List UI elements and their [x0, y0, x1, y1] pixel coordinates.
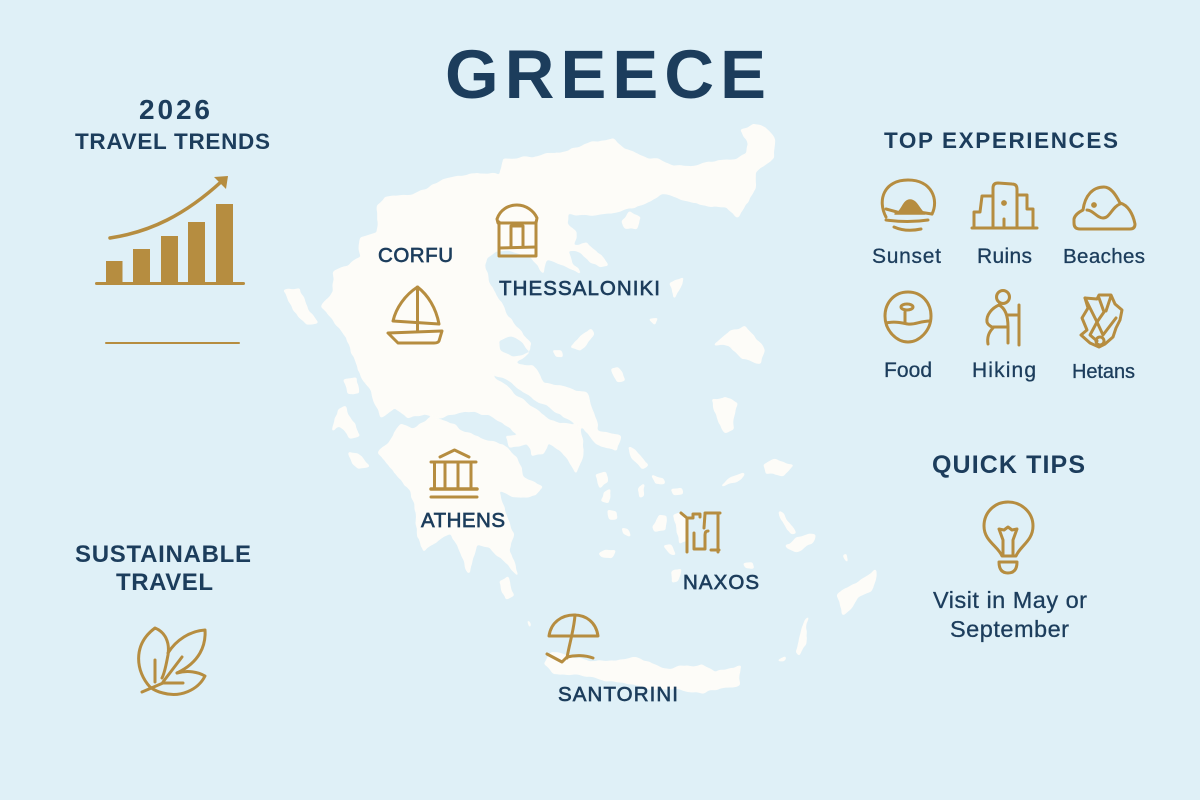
- heading: 2026: 2026: [139, 94, 210, 125]
- heading: sustainable travel: TRAVEL: [116, 569, 213, 596]
- icon: temple: [431, 450, 477, 497]
- label: beaches: Beaches: [1063, 245, 1145, 268]
- marker: Corfu: [378, 244, 453, 343]
- label: Naxos: NAXOS: [683, 571, 759, 594]
- heading: top experiences: TOP EXPERIENCES: [884, 128, 1118, 153]
- panel: sustainable travel: [75, 541, 251, 694]
- panel: travel trends: [75, 94, 270, 343]
- label: Thessaloniki: THESSALONIKI: [499, 277, 660, 300]
- panel: top experiences: [872, 128, 1145, 383]
- panel: quick tips: [932, 451, 1087, 642]
- icon: food: [885, 292, 931, 342]
- icon: sunset: [882, 180, 935, 230]
- label: hiking: Hiking: [972, 359, 1036, 382]
- label: food: Food: [884, 359, 932, 382]
- tip text: Visit in May or: [933, 587, 1087, 613]
- heading: sustainable travel: SUSTAINABLE: [75, 541, 251, 568]
- label: hetans: Hetans: [1072, 361, 1135, 383]
- icon: hiking: [987, 290, 1019, 345]
- heading: travel trends: TRAVEL TRENDS: [75, 129, 270, 154]
- icon: beaches: [1074, 187, 1135, 229]
- icon: hetans: [1081, 295, 1122, 347]
- icon: leaf: [139, 628, 205, 694]
- marker: Thessaloniki: [497, 205, 660, 300]
- icon: bar chart with arrow: [96, 176, 244, 284]
- label: Athens: ATHENS: [421, 509, 505, 532]
- icon: domed building: [497, 205, 537, 256]
- tip text: September: [950, 616, 1069, 642]
- icon: castle ruins: [681, 513, 720, 552]
- tip text: [933, 587, 1087, 642]
- icon: ruins: [972, 183, 1037, 228]
- label: ruins: Ruins: [977, 245, 1032, 268]
- label: Corfu: CORFU: [378, 244, 453, 267]
- map of Greece: [285, 124, 876, 692]
- title: GREECE: [445, 36, 766, 113]
- marker: Naxos: [681, 513, 759, 594]
- label: Santorini: SANTORINI: [558, 683, 678, 706]
- marker: Santorini: [547, 615, 678, 706]
- icon: sailboat: [388, 287, 442, 343]
- label: sunset: Sunset: [872, 245, 941, 268]
- icon: light bulb: [984, 502, 1033, 573]
- icon: beach umbrella: [547, 615, 598, 662]
- heading: sustainable travel: [75, 541, 251, 596]
- heading: quick tips: QUICK TIPS: [932, 451, 1085, 479]
- marker: Athens: [421, 450, 505, 532]
- divider line: [106, 342, 239, 344]
